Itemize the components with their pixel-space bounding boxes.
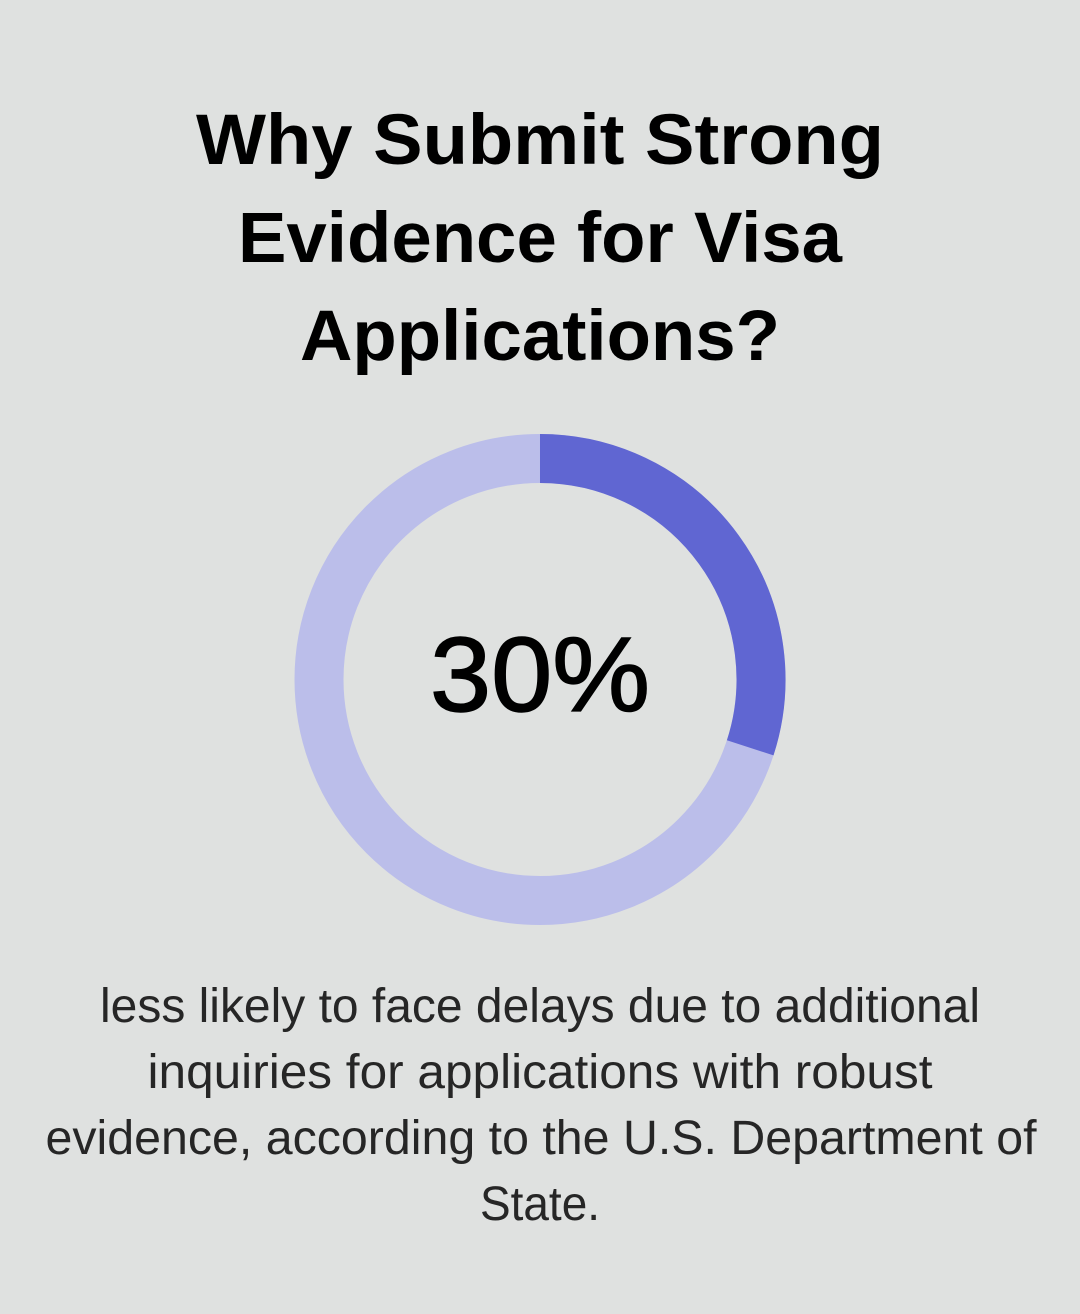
description: evidence, according to the U.S. Department of — [46, 1112, 1037, 1165]
title: Evidence for Visa — [238, 199, 843, 278]
title: Applications? — [300, 297, 780, 376]
donut highlighted segment — [540, 458, 761, 748]
title: Why Submit Strong — [196, 101, 884, 180]
description — [46, 980, 1037, 1231]
stat value: 30% — [430, 616, 650, 734]
description: State. — [480, 1178, 600, 1231]
donut track — [319, 458, 761, 900]
description: inquiries for applications with robust — [148, 1046, 932, 1099]
donut chart: 30% — [319, 458, 761, 900]
title — [196, 101, 884, 376]
description: less likely to face delays due to additional — [100, 980, 980, 1033]
